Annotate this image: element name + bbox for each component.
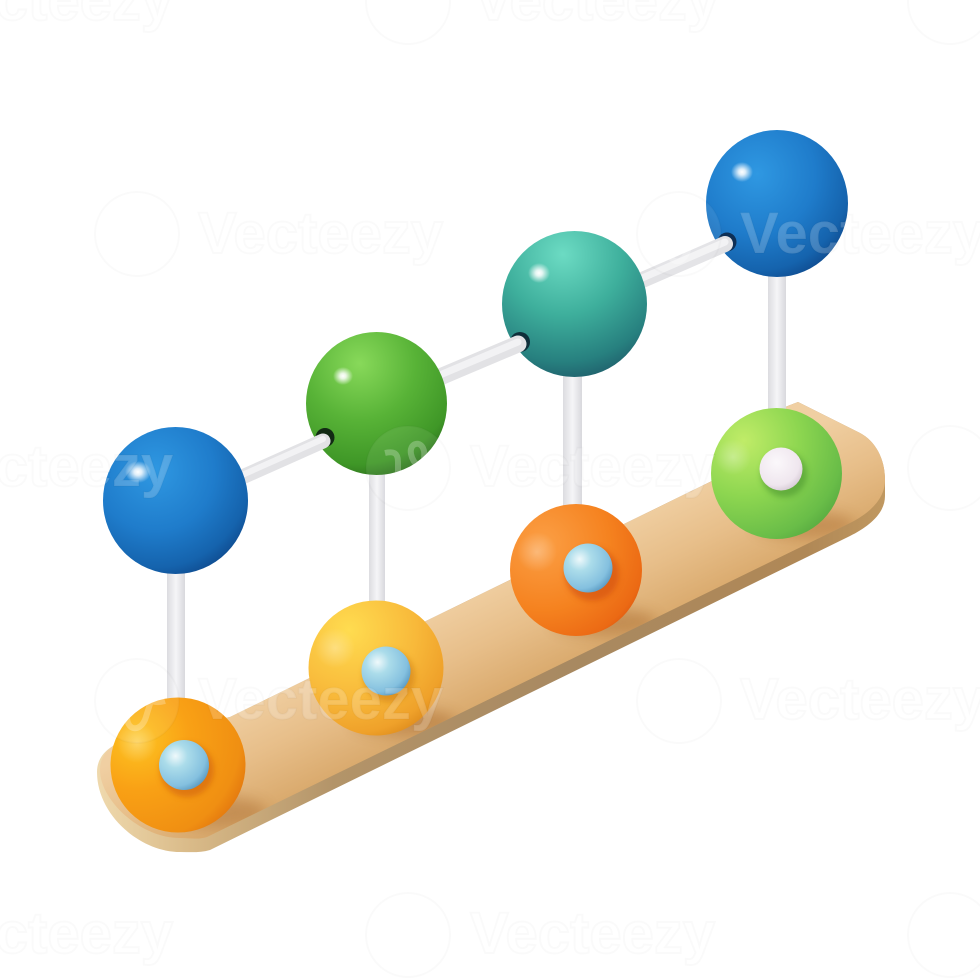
watermark: Vecteezy <box>740 201 980 266</box>
upper sphere: blue 1 <box>103 427 248 574</box>
watermark: Vecteezy <box>470 434 715 499</box>
watermark: Vecteezy <box>470 901 715 966</box>
contact shadows on board <box>163 511 855 828</box>
vertical rods <box>167 268 786 710</box>
upper sphere: teal <box>502 231 647 377</box>
lower sphere: lime with white pearl <box>711 408 842 539</box>
wooden base board <box>97 402 885 852</box>
connector rod: blue to green <box>240 428 334 478</box>
connector rod: teal to blue <box>640 232 736 281</box>
upper sphere: blue 2 <box>706 130 848 277</box>
watermark: Vecteezy <box>740 667 980 732</box>
lower sphere: amber with pearl <box>110 698 246 832</box>
lower sphere: yellow with pearl <box>308 600 444 736</box>
connector rod: green to teal <box>440 332 530 377</box>
lower sphere: orange with pearl <box>510 504 642 636</box>
watermark: Vecteezy <box>198 201 443 266</box>
watermark: Vecteezy <box>198 667 443 732</box>
upper sphere: green <box>306 332 447 475</box>
board rim <box>97 402 885 852</box>
board top surface <box>100 402 885 839</box>
